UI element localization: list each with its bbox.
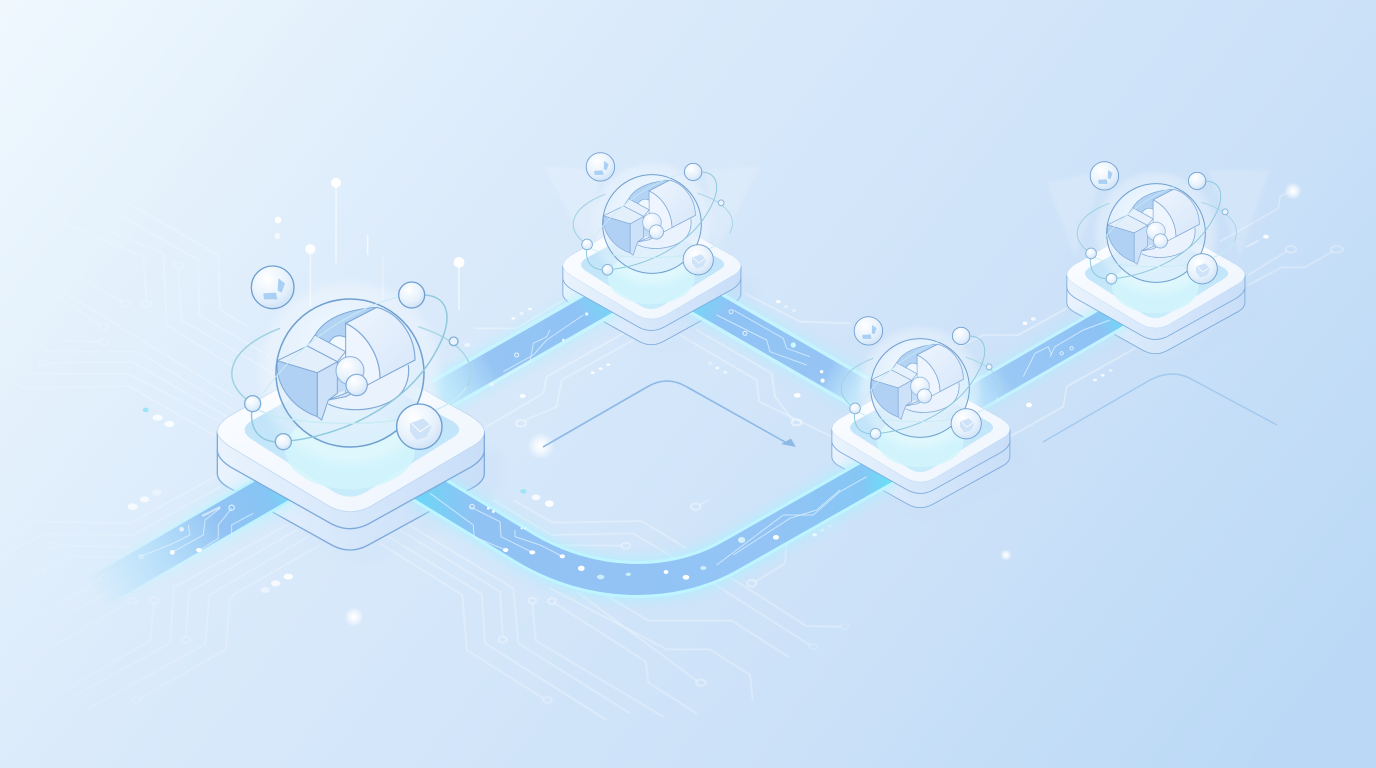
glowing path: node 2 to node 3 [690, 294, 860, 392]
circuit traces: right [960, 193, 1343, 437]
glowing path: node 3 to node 4 [960, 312, 1122, 406]
glowing path: node 1 to node 2 [440, 295, 615, 395]
glowing path: main curve from node 1 to node 3 [420, 468, 885, 580]
light cones behind the upper nodes [543, 165, 1270, 258]
platform base 3 [832, 441, 1010, 508]
circuit traces: lower left [153, 526, 320, 652]
platform base 4 [1067, 287, 1245, 354]
circuit traces: upper left [178, 268, 258, 436]
scattered light dots [128, 235, 1269, 593]
circuit traces [153, 192, 1344, 720]
node 4: platform [1067, 223, 1245, 339]
circuit traces: lower centre [380, 500, 853, 720]
node 1: platform [217, 353, 484, 529]
arrow: faint right flow line [1043, 374, 1277, 442]
node 3: platform [832, 377, 1010, 493]
platform base 2 [563, 278, 741, 345]
sparkles [344, 182, 1302, 627]
node 2: platform [563, 214, 741, 330]
circuit traces: centre [475, 293, 850, 437]
node 2: glass orb with block and satellites [573, 153, 733, 284]
rising light stems above the first node [274, 178, 464, 310]
platform base 1 [217, 450, 484, 550]
platform shadows [229, 283, 1255, 556]
glowing path: lower left entry [95, 483, 285, 593]
node 1: glass orb with block and satellites [232, 266, 471, 463]
node 3: glass orb with block and satellites [841, 317, 1001, 448]
node 4: glass orb with block and satellites [1077, 162, 1237, 293]
arrow: centre flow arrow [527, 381, 796, 460]
